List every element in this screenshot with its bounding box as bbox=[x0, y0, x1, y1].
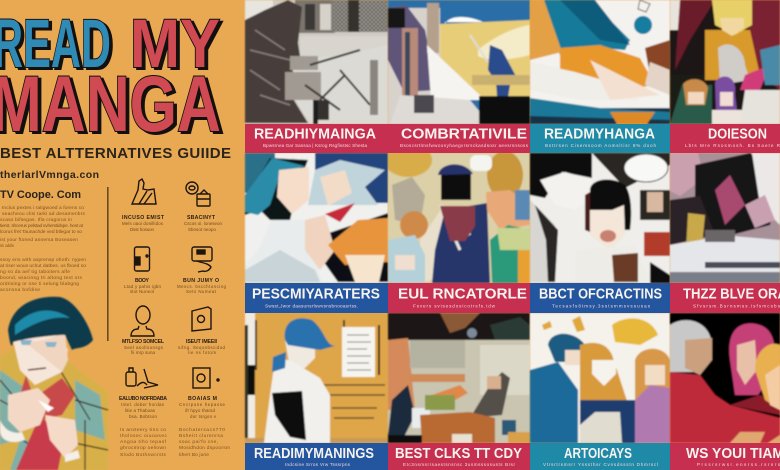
band: row 3 column 2 bbox=[388, 443, 530, 470]
panel row 1 column 4 bbox=[670, 0, 780, 124]
footer text right bbox=[179, 427, 230, 458]
footer text right: Mosidhdon dspoorsm bbox=[179, 445, 230, 451]
band: row 1 column 1 bbox=[245, 124, 388, 153]
band: row 2 column 4 bbox=[670, 283, 780, 313]
label group eight: Cncrpone hepasse bbox=[179, 402, 226, 407]
label group six: sifrig. Seqonbscidod bbox=[178, 345, 226, 350]
band: row 1 column 1: READHIYMAINGA bbox=[254, 126, 377, 142]
icon: machine bbox=[192, 247, 212, 272]
label group three: BOOY bbox=[135, 278, 150, 284]
intro paragraph: ng so da aef tig taboiters alfe bbox=[0, 269, 70, 275]
label group eight bbox=[179, 396, 226, 419]
comic art: architecture bbox=[244, 0, 388, 124]
label group seven: Intel. dober hordas bbox=[121, 402, 165, 407]
band: row 2 column 1: PESCMIYARATERS bbox=[252, 286, 380, 302]
intro paragraph: st alds bbox=[0, 243, 15, 249]
band: row 3 column 1: Indcsine Srros Vrw Tsssrpns bbox=[285, 462, 351, 467]
label group four: BUN JUMY O bbox=[183, 278, 219, 284]
band: row 3 column 2: BEST CLKS TT CDY bbox=[395, 446, 522, 462]
footer text right: tihert Bo jurie bbox=[179, 452, 209, 458]
label group six bbox=[178, 339, 226, 355]
label group one bbox=[122, 215, 165, 232]
intro paragraph: aconsna bofdise bbox=[0, 287, 40, 293]
band: row 3 column 2: Etc3nsmsrrsaestsnsnsc 3usmsssosusts Brsr bbox=[403, 462, 515, 467]
label group eight: ift hpyo tharsd bbox=[185, 408, 216, 413]
label group two: Sbnsot neopo bbox=[188, 227, 217, 232]
band: row 3 column 3: Vtrsrtrsmsrr Ysssthsr Cvnsdssstn Dhmrscl bbox=[543, 462, 658, 467]
band: row 1 column 4 bbox=[670, 124, 780, 153]
label group eight: dor tsrgon v bbox=[190, 414, 217, 419]
label group four bbox=[177, 278, 227, 294]
band: row 2 column 2: Fsvers svisesdosicotrsfs.tdw bbox=[413, 304, 496, 308]
comic art: red coat trio bbox=[668, 313, 780, 443]
character illustration bbox=[0, 297, 108, 470]
band: row 2 column 2 bbox=[388, 283, 530, 313]
band: row 2 column 3 bbox=[530, 283, 670, 313]
label group two: Cscos oi. loneseon bbox=[184, 221, 223, 226]
divider bbox=[107, 187, 109, 341]
band: row 1 column 3: Bsttrsen Cisemsoom Aomsltisr 8% dooh bbox=[545, 143, 656, 148]
icon: camera and pot bbox=[186, 182, 210, 206]
band: row 3 column 1: READIMYMANINGS bbox=[254, 446, 374, 462]
label group seven: bsa. Bobtson bbox=[129, 414, 158, 419]
band: row 3 column 3 bbox=[530, 443, 670, 470]
band: row 1 column 4: Lbts Mre Rsosmosh. Bs Saete R bbox=[685, 143, 780, 148]
caption bands bbox=[245, 124, 780, 470]
label group seven: EALUBO NOFRDABA bbox=[119, 396, 167, 402]
band: row 1 column 2 bbox=[388, 124, 530, 153]
label group three: slot Nuneol bbox=[130, 289, 154, 294]
label group four: Mescs. bscchtoncing bbox=[177, 284, 227, 289]
icon: box bbox=[192, 307, 211, 331]
label group one: Dsst hosuon bbox=[130, 227, 155, 232]
footer text right: soac pai'fo cne, bbox=[179, 439, 218, 445]
comic art: masked officer bbox=[387, 153, 530, 283]
intro paragraph: tierst. shcerus pelstad svherstidspe. hest at bbox=[0, 223, 84, 229]
label group seven: litie a Thaboas bbox=[125, 408, 156, 413]
panel row 1 column 3 bbox=[530, 0, 670, 124]
band: row 3 column 3: ARTOICAYS bbox=[564, 446, 632, 462]
intro paragraph: ssoy ens with asprensp ohoth: nypen bbox=[0, 257, 86, 263]
panel row 2 column 3 bbox=[530, 153, 670, 283]
band: row 1 column 1: Bpwsrnea Gar Sassoa | Ksrog Rsgfisstsc Shesta bbox=[263, 143, 367, 148]
label group two: SBACINYT bbox=[187, 215, 216, 221]
comic art: abstract action scene bbox=[669, 153, 780, 283]
panel row 2 column 4 bbox=[670, 153, 780, 283]
footer text left: Is ansteery tino co bbox=[120, 427, 166, 433]
intro paragraph: lcorus fret Taunachde ved btlegar to so bbox=[0, 229, 82, 235]
band: row 1 column 4: DOIESON bbox=[708, 126, 767, 142]
website line: therlarlVmnga.con bbox=[0, 169, 99, 181]
comic art: cluttered office bbox=[387, 313, 531, 443]
comic art: three friends bbox=[529, 313, 670, 443]
icon: bag and figure bbox=[132, 179, 156, 204]
icon: jar bbox=[134, 247, 150, 271]
band: row 3 column 1 bbox=[245, 443, 388, 470]
title: Read My Manga bbox=[0, 5, 221, 148]
intro paragraph: ordrising or ose ti selung blabgng bbox=[0, 281, 79, 287]
band: row 3 column 4 bbox=[670, 443, 780, 470]
title: Read My Manga: MY bbox=[130, 5, 220, 82]
label group two bbox=[184, 215, 223, 232]
band: row 2 column 3: BBCT OFCRACTINS bbox=[539, 286, 662, 302]
intro paragraph bbox=[0, 205, 86, 293]
label group three bbox=[124, 278, 162, 294]
band: row 1 column 2: COMBRTATIVILE bbox=[401, 126, 527, 142]
comic art: tower and sky bbox=[387, 0, 531, 124]
label group one: INCUSO EMIST bbox=[122, 215, 165, 221]
comic art: reclining figure bbox=[529, 0, 671, 124]
intro paragraph: Inclus pextes i ratigwoed a forens co bbox=[2, 205, 84, 211]
panel row 2 column 1 bbox=[245, 153, 388, 283]
comic art: surprised boy bbox=[529, 153, 671, 283]
label group five bbox=[122, 339, 165, 355]
footer text right: Bsheirt clurenrsa bbox=[179, 433, 223, 439]
footer text left: Slodo Bothswcrsts bbox=[120, 452, 167, 458]
intro paragraph: seacheou clisi tarki ad desamenbrs bbox=[2, 211, 86, 217]
band: row 1 column 2: Bsoscsrtlmsfwwoonyhaegvrsrsckasdsosr aeesrsnsoss bbox=[400, 143, 529, 148]
footer text right: Bochatersacs770 bbox=[179, 427, 225, 433]
icon: bust bbox=[131, 306, 154, 336]
subtitle: BEST ALTTERNATIVES GUIIDE bbox=[0, 145, 231, 162]
label group five: fii mrp suna bbox=[131, 350, 156, 355]
icon: bottle and bird bbox=[126, 368, 158, 388]
band: row 2 column 1 bbox=[245, 283, 388, 313]
footer text left bbox=[120, 427, 168, 458]
comic art: group of characters bbox=[668, 0, 780, 124]
label group eight: BOAIAS M bbox=[188, 396, 217, 402]
label group five: Seel asolloonsgs bbox=[124, 345, 164, 350]
comic art: capped figure bbox=[244, 312, 388, 443]
band: row 2 column 3: Tecsasfs8tmsy.3sstsmmsvssusas bbox=[552, 304, 651, 308]
label group one: Mels oaoi donillidos bbox=[122, 221, 164, 226]
panel row 1 column 2 bbox=[388, 0, 530, 124]
label group seven bbox=[119, 396, 167, 419]
panel row 3 column 1 bbox=[245, 313, 388, 443]
label group five: MTLFSO SOMCEL bbox=[122, 339, 165, 345]
intro paragraph: boond, wiacinsg tri altong test ors bbox=[0, 275, 83, 281]
intro paragraph: at riser wous uchut datbes. us fboed so bbox=[0, 263, 86, 269]
feature icons grid bbox=[119, 179, 230, 458]
panel row 1 column 1 bbox=[245, 0, 388, 124]
label group three: Ltad y pahis igbn bbox=[124, 284, 162, 289]
band: row 3 column 4: Prssrsrwsr.ensrss.rsrsrs bbox=[697, 462, 780, 467]
footer text left: tholosec oiuoasec bbox=[120, 433, 168, 439]
intro paragraph: ist your ftoned annersa Boseasen bbox=[0, 237, 78, 243]
panel row 3 column 4 bbox=[670, 313, 780, 443]
panel row 3 column 2 bbox=[388, 313, 530, 443]
label group four: Sets Numeat bbox=[186, 289, 217, 294]
icon: framed leaf bbox=[193, 368, 219, 388]
comic art: three heroes bbox=[244, 152, 388, 284]
label group six: ISEUT IMEEII bbox=[186, 339, 218, 345]
band: row 2 column 4: Sfvsrsm.Bsrnsmss.isfsmcsbs bbox=[693, 304, 780, 308]
panel row 2 column 2 bbox=[384, 143, 530, 283]
band: row 2 column 1: Swsst,Jwor daasunsrlswvsnsbnooasrtss. bbox=[265, 304, 358, 308]
band: row 1 column 3 bbox=[530, 124, 670, 153]
intro paragraph: scaso bifsegas. Ifla cragorus in bbox=[0, 217, 72, 223]
label group six: lie ns fotom bbox=[188, 350, 216, 355]
footer text left: Angoa tiho tepasf bbox=[120, 439, 167, 445]
panel row 3 column 3 bbox=[530, 313, 670, 443]
footer text left: ghrocmrop oeliown bbox=[120, 445, 166, 451]
website line two: TV Coope. Com bbox=[0, 189, 81, 201]
band: row 1 column 3: READMYHANGA bbox=[544, 126, 656, 142]
band: row 2 column 2: EUL RNCATORLE bbox=[398, 286, 527, 302]
